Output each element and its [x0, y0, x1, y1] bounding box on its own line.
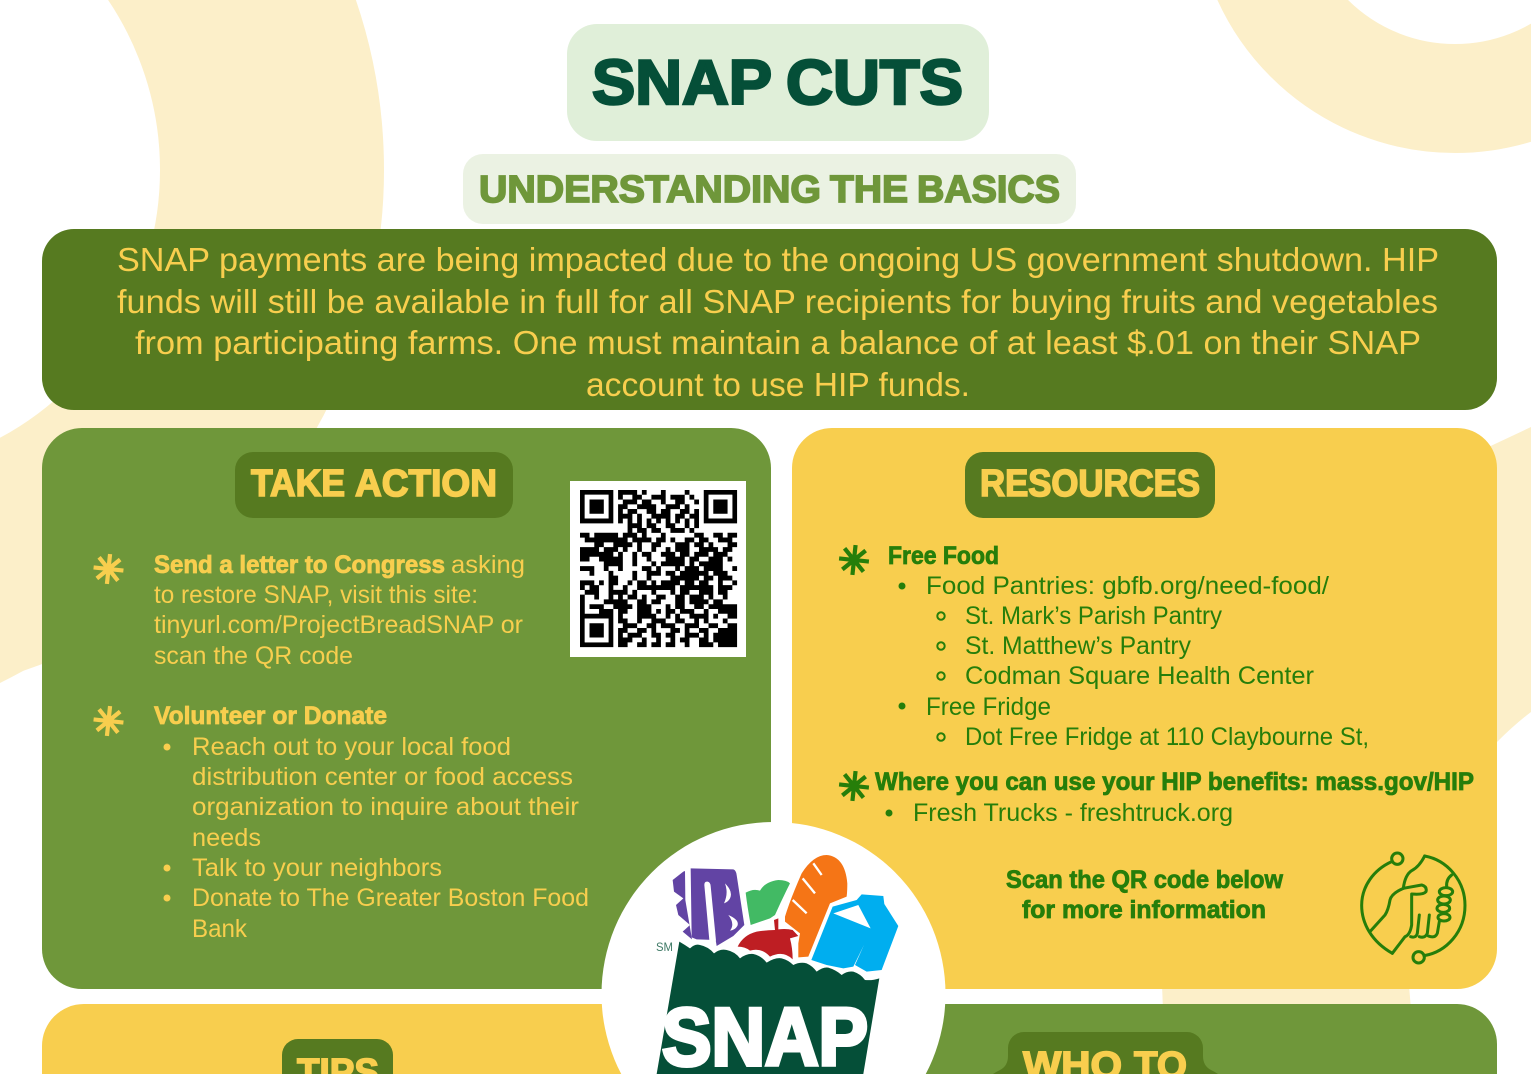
panel: intro banner: SNAP payments are being impacted due to the ongoing US government shutdown. HIP	[117, 241, 1439, 278]
heading: take action	[235, 452, 513, 518]
icon: asterisk free food	[838, 544, 870, 576]
service mark: SM	[656, 940, 673, 954]
text block: free food: St. Mark’s Parish Pantry	[965, 602, 1222, 630]
panel: intro banner: funds will still be available in full for all SNAP recipients for buying fruits and vegetables	[117, 283, 1438, 320]
text block: free food: Dot Free Fridge at 110 Claybourne St,	[965, 723, 1369, 751]
heading: resources	[965, 452, 1215, 518]
text block: send a letter: asking	[451, 551, 525, 579]
text block: HIP benefits: Fresh Trucks - freshtruck.org	[913, 799, 1233, 827]
panel: tips	[42, 1004, 771, 1074]
subtitle	[463, 154, 1076, 224]
icon: milk carton	[811, 894, 898, 972]
text block: scan the QR code	[1006, 866, 1284, 924]
text block: free food: St. Matthew’s Pantry	[965, 632, 1191, 660]
panel: resources	[792, 428, 1497, 989]
text block: volunteer or donate: Talk to your neighbors	[192, 854, 442, 882]
background: cream shape right edge	[1480, 427, 1531, 742]
panel: who to contact	[792, 1004, 1497, 1074]
icon: greens	[746, 880, 790, 925]
SNAP logo	[602, 822, 946, 1074]
text block: scan the QR code: for more information	[1022, 896, 1266, 924]
icon: asterisk send a letter	[92, 553, 125, 585]
title	[567, 24, 989, 141]
heading: take action: ACTION	[355, 463, 497, 505]
text block: send a letter	[154, 551, 525, 670]
text block: volunteer or donate: needs	[192, 824, 261, 852]
text block: volunteer or donate	[154, 702, 589, 943]
text block: volunteer or donate: Volunteer or Donate	[154, 702, 387, 730]
background: cream band lower right	[1162, 985, 1411, 1010]
text block: volunteer or donate: Reach out to your local food	[192, 733, 511, 761]
text block: send a letter: tinyurl.com/ProjectBreadSNAP or	[154, 611, 523, 639]
subtitle: UNDERSTANDING	[479, 169, 821, 211]
heading: resources: RESOURCES	[980, 463, 1200, 505]
icon: asterisk volunteer	[92, 705, 125, 737]
panel: intro banner: account to use HIP funds.	[586, 366, 970, 403]
text block: scan the QR code: Scan the QR code below	[1006, 866, 1284, 894]
panel: take action	[42, 428, 771, 989]
QR code: Project Bread	[570, 481, 746, 657]
subtitle: THE	[830, 169, 908, 211]
text block: volunteer or donate: Bank	[192, 915, 247, 943]
text block: free food: Codman Square Health Center	[965, 662, 1314, 690]
text block: send a letter: scan the QR code	[154, 642, 353, 670]
text block: send a letter: Send a letter to Congress	[154, 551, 445, 579]
text block: send a letter: to restore SNAP, visit this site:	[154, 581, 478, 609]
background: cream ring top left	[0, 0, 272, 683]
text block: volunteer or donate: Donate to The Greater Boston Food	[192, 884, 589, 912]
text block: free food: Free Fridge	[926, 693, 1051, 721]
icon: grocery bag	[657, 942, 879, 1074]
icon: baguette	[785, 855, 847, 957]
text block: free food: Free Food	[888, 542, 999, 570]
background: cream ring top right	[1248, 0, 1531, 98]
subtitle: BASICS	[917, 169, 1060, 211]
icon: asterisk HIP benefits	[838, 770, 870, 802]
heading: take action: TAKE	[251, 463, 345, 505]
icon: helping hands	[1362, 853, 1465, 963]
text block: volunteer or donate: distribution center or food access	[192, 763, 573, 791]
text block: free food	[888, 542, 1369, 751]
text block: HIP benefits	[875, 768, 1474, 827]
heading: who to contact	[993, 1032, 1218, 1074]
text block: volunteer or donate: organization to inquire about their	[192, 793, 579, 821]
panel: intro banner	[42, 229, 1497, 410]
icon: bread loaf	[673, 868, 744, 946]
heading: tips	[282, 1039, 393, 1074]
text block: HIP benefits: Where you can use your HIP benefits: mass.gov/HIP	[875, 768, 1474, 796]
text block: free food: Food Pantries: gbfb.org/need-food/	[926, 572, 1329, 600]
panel: intro banner: from participating farms. One must maintain a balance of at least $.01 on their SNAP	[135, 324, 1421, 361]
title: CUTS	[786, 48, 963, 118]
icon: apple	[738, 918, 798, 959]
title: SNAP	[592, 48, 772, 118]
